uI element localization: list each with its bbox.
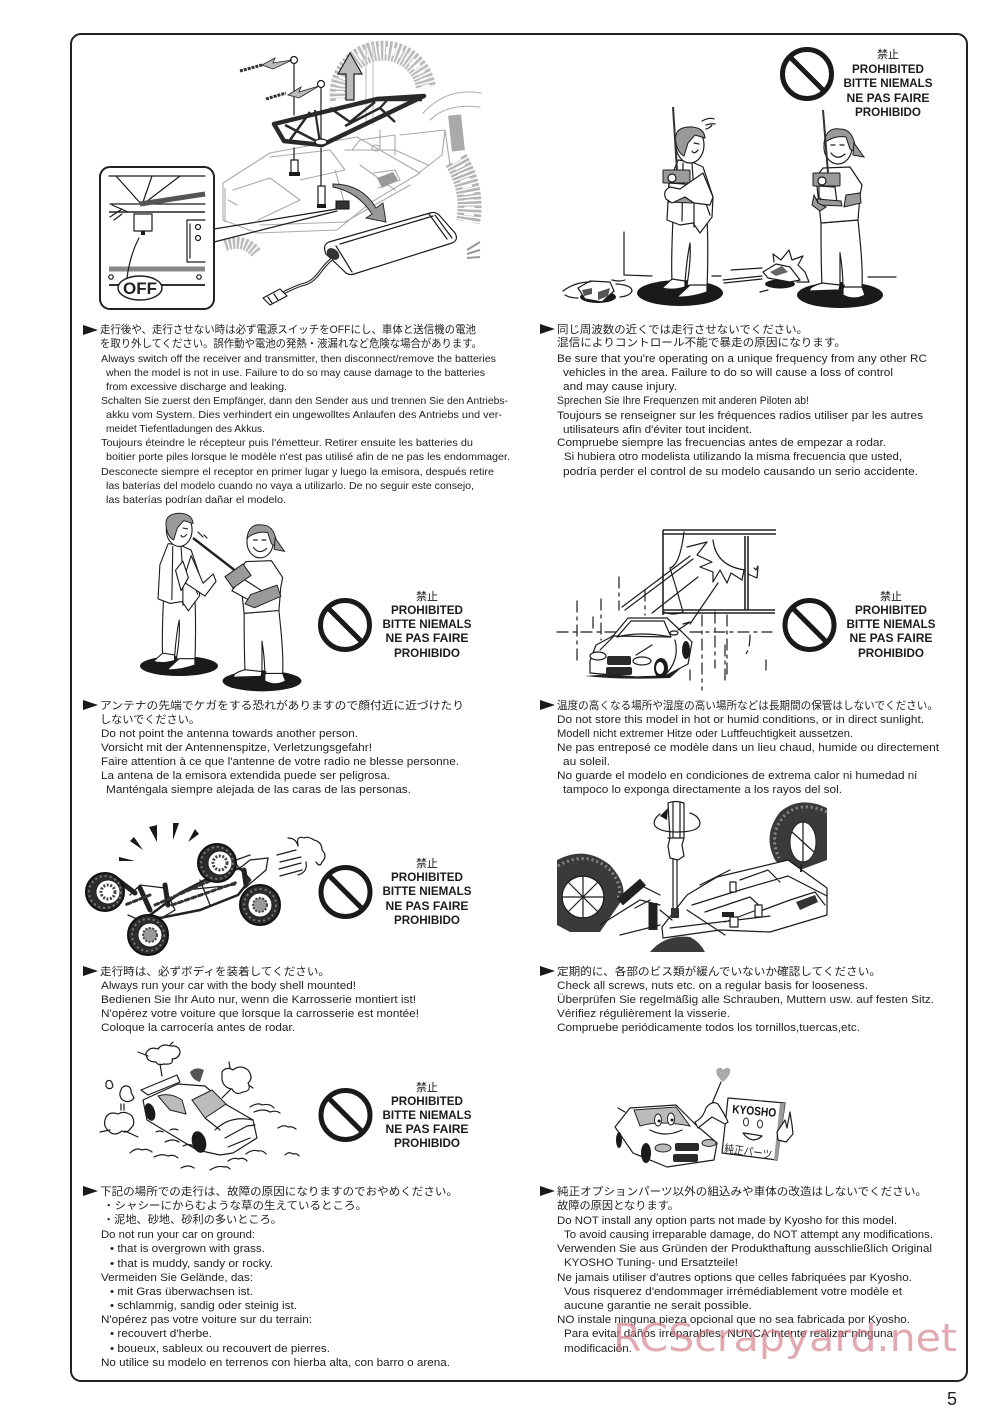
text block: vehicles in the area. Failure to do so will cause a loss of control [563, 367, 893, 379]
text block: 混信によりコントロール不能で暴走の原因になります。 [557, 336, 846, 349]
text block: 温度の高くなる場所や湿度の高い場所などは長期間の保管はしないでください。 [557, 699, 938, 712]
text block: 同じ周波数の近くでは走行させないでください。 [557, 323, 808, 336]
suspension [600, 882, 672, 935]
text block: Modell nicht extremer Hitze oder Luftfeuchtigkeit aussetzen. [557, 728, 853, 740]
illustration: two drivers crashing cars [563, 107, 896, 308]
parts box: 純正パーツ [724, 1142, 773, 1162]
prohibited sign: PROHIBITED [391, 603, 463, 617]
text block: 純正オプションパーツ以外の組込みや車体の改造はしないでください。 [557, 1185, 927, 1198]
text block: Si hubiera otro modelista utilizando la misma frecuencia que usted, [564, 451, 902, 463]
text block [83, 965, 419, 1034]
text block: las baterías podrían dañar el modelo. [106, 495, 286, 506]
text block [83, 699, 464, 796]
illustration: buggy without body [86, 823, 325, 955]
panel: antenna [83, 513, 472, 796]
text block: akku vom System. Dies verhindert ein ungewolltes Anlaufen des Antriebs und ver- [106, 410, 502, 421]
text block [540, 965, 934, 1034]
text block: and may cause injury. [563, 381, 677, 393]
sun and flare [687, 540, 745, 583]
prohibited sign: NE PAS FAIRE [386, 899, 468, 913]
person with cap [223, 525, 301, 691]
text block: utilisateurs afin d'éviter tout incident. [563, 424, 752, 436]
heat dashes [557, 577, 772, 690]
prohibited sign: NE PAS FAIRE [386, 1122, 468, 1136]
watermark: RCScrapyard.net [613, 1316, 957, 1360]
prohibited sign: NE PAS FAIRE [850, 631, 932, 645]
text block: • boueux, sableux ou recouvert de pierres. [110, 1343, 330, 1355]
prohibited sign: PROHIBIDO [394, 646, 460, 660]
text block: ・シャシーにからむような草の生えているところ。 [103, 1199, 367, 1212]
panel: check screws [540, 802, 934, 1034]
panel: heat and humidity [540, 530, 939, 796]
car with face [615, 1105, 717, 1167]
prohibited sign: 禁止 [880, 590, 902, 603]
panel: genuine parts [540, 1068, 933, 1355]
prohibited sign: BITTE NIEMALS [382, 617, 472, 631]
prohibited sign: 禁止 [416, 857, 438, 870]
text block: Schalten Sie zuerst den Empfänger, dann den Sender aus und trennen Sie den Antriebs- [101, 396, 508, 407]
text block [83, 1185, 458, 1369]
text block: Compruebe siempre las frecuencias antes de empezar a rodar. [557, 437, 886, 449]
text block: Vermeiden Sie Gelände, das: [101, 1272, 253, 1284]
prohibited sign: 禁止 [877, 48, 899, 61]
prohibited sign: 禁止 [416, 1081, 438, 1094]
page number: 5 [947, 1389, 957, 1409]
text block: Do not store this model in hot or humid conditions, or in direct sunlight. [557, 714, 924, 726]
text block: Do NOT install any option parts not made by Kyosho for this model. [557, 1215, 897, 1227]
text block: • that is muddy, sandy or rocky. [110, 1258, 273, 1270]
text block: NO instale ninguna pieza opcional que no sea fabricada por Kyosho. [557, 1314, 910, 1326]
prohibited sign: PROHIBIDO [858, 646, 924, 660]
prohibited sign [782, 48, 932, 119]
driver with jacket [637, 107, 723, 306]
text block: Toujours éteindre le récepteur puis l'émetteur. Retirer ensuite les batteries du [101, 438, 473, 449]
prohibited sign: PROHIBIDO [394, 913, 460, 927]
text block: Always run your car with the body shell mounted! [101, 980, 356, 992]
text block: tampoco lo exponga directamente a los rayos del sol. [563, 784, 842, 796]
text block: ・泥地、砂地、砂利の多いところ。 [103, 1213, 282, 1226]
prohibited sign [320, 590, 472, 660]
text block [83, 322, 510, 506]
text block: Ne pas entreposé ce modèle dans un lieu chaud, humide ou directement [557, 742, 939, 754]
text block: podría perder el control de su modelo causando un serio accidente. [563, 466, 918, 478]
text block: Faire attention à ce que l'antenne de votre radio ne blesse personne. [101, 756, 459, 768]
crashing car [723, 250, 809, 292]
text block: Do not run your car on ground: [101, 1229, 255, 1241]
prohibited sign [321, 1081, 472, 1150]
text block: Vous risquerez d'endommager irrémédiablement votre modèle et [564, 1286, 902, 1298]
text block [540, 1185, 933, 1355]
prohibited sign: PROHIBITED [391, 1094, 463, 1108]
text block [540, 323, 927, 478]
prohibited sign [321, 857, 472, 927]
text block: Ne jamais utiliser d'autres options que celles fabriquées par Kyosho. [557, 1272, 912, 1284]
text block: Verwenden Sie aus Gründen der Produkthaftung ausschließlich Original [557, 1243, 932, 1255]
prohibited sign: NE PAS FAIRE [386, 631, 468, 645]
person with jacket [140, 513, 218, 676]
inset: OFF switch [100, 167, 214, 309]
callout lines [214, 209, 337, 242]
text block: N'opérez votre voiture que lorsque la carrosserie est montée! [101, 1008, 419, 1020]
text block: La antena de la emisora extendida puede ser peligrosa. [101, 770, 390, 782]
text block [540, 699, 939, 796]
up arrow [338, 53, 362, 100]
prohibited sign: PROHIBITED [852, 62, 924, 76]
prohibited sign: BITTE NIEMALS [382, 1108, 472, 1122]
panel: body shell [83, 823, 472, 1034]
text block: しないでください。 [100, 714, 200, 726]
parts box [722, 1098, 785, 1162]
curved removal arrow [333, 184, 386, 222]
prohibited sign: PROHIBITED [855, 603, 927, 617]
illustration: car in grass and mud [100, 1042, 299, 1170]
text block: Check all screws, nuts etc. on a regular basis for looseness. [557, 980, 868, 992]
text block: Bedienen Sie Ihr Auto nur, wenn die Karrosserie montiert ist! [101, 994, 416, 1006]
prohibited sign: PROHIBIDO [394, 1136, 460, 1150]
text block: N'opérez pas votre voiture sur du terrain: [101, 1314, 312, 1326]
text block: Vérifiez régulièrement la visserie. [557, 1008, 730, 1020]
sun rays [622, 556, 718, 624]
text block: Sprechen Sie Ihre Frequenzen mit anderen Piloten ab! [557, 395, 809, 407]
tyres [86, 844, 280, 955]
text block: modificación. [564, 1343, 632, 1355]
mud lumps [130, 1104, 299, 1170]
prohibited sign: PROHIBIDO [855, 105, 921, 119]
text block: au soleil. [563, 756, 610, 768]
victory hand [777, 1112, 793, 1142]
car [585, 618, 692, 679]
text block: Compruebe periódicamente todos los tornillos,tuercas,etc. [557, 1022, 860, 1034]
rear tyres ghost [225, 44, 480, 258]
illustration: ghost chassis with battery removal [100, 44, 481, 309]
inset: OFF switch: OFF [123, 279, 157, 298]
text block: To avoid causing irreparable damage, do NOT attempt any modifications. [564, 1229, 933, 1241]
walls and ground lines [624, 232, 896, 277]
text block: • that is overgrown with grass. [110, 1243, 265, 1255]
text block: Coloque la carrocería antes de rodar. [101, 1022, 295, 1034]
text block: 故障の原因となります。 [557, 1199, 679, 1212]
illustration: car and KYOSHO parts box [615, 1068, 793, 1167]
text block: No guarde el modelo en condiciones de extrema calor ni humedad ni [557, 770, 917, 782]
parts box: KYOSHO [732, 1102, 777, 1120]
spinning car [563, 280, 632, 303]
prohibited sign: 禁止 [416, 590, 438, 603]
prohibited sign: BITTE NIEMALS [382, 884, 472, 898]
text block: boitier porte piles lorsque le modèle n'est pas utilisé afin de ne pas les endommager. [106, 452, 510, 463]
text block: from excessive discharge and leaking. [106, 382, 287, 393]
text block: when the model is not in use. Failure to do so may cause damage to the batteries [105, 368, 485, 379]
tyres [557, 802, 827, 952]
screws and posts [240, 56, 327, 208]
window frame [663, 530, 776, 615]
battery pack [263, 212, 456, 305]
text block: meidet Tiefentladungen des Akkus. [106, 424, 265, 435]
text block: 走行後や、走行させない時は必ず電源スイッチをOFFにし、車体と送信機の電池 [100, 322, 476, 336]
grass tufts [100, 1042, 253, 1137]
driver with cap [797, 110, 883, 308]
text block: las baterías del modelo cuando no vaya a utilizarlo. De no seguir este consejo, [106, 481, 474, 492]
text block: Vorsicht mit der Antennenspitze, Verletzungsgefahr! [101, 742, 372, 754]
text block: 下記の場所での走行は、故障の原因になりますのでおやめください。 [100, 1185, 458, 1198]
text block: • schlammig, sandig oder steinig ist. [110, 1300, 297, 1312]
chassis [662, 860, 827, 938]
text block: No utilice su modelo en terrenos con hierba alta, con barro o arena. [101, 1357, 450, 1369]
impact marks [119, 823, 199, 861]
transmitter and antenna [193, 532, 251, 588]
text block: を取り外してください。誤作動や電池の発熱・液漏れなど危険な場合があります。 [100, 336, 482, 350]
text block: Desconecte siempre el receptor en primer lugar y luego la emisora, después retire [101, 467, 494, 478]
text block: Be sure that you're operating on a unique frequency from any other RC [557, 353, 927, 365]
switch box [336, 201, 349, 209]
heart on stick [711, 1068, 730, 1106]
text block: Manténgala siempre alejada de las caras de las personas. [106, 784, 411, 796]
prohibited sign: PROHIBITED [391, 870, 463, 884]
text block: Überprüfen Sie regelmäßig alle Schrauben, Muttern usw. auf festen Sitz. [557, 994, 934, 1006]
text block: Para evitar daños irreparables, NUNCA intente realizar ninguna [564, 1328, 893, 1340]
prohibited sign [785, 590, 936, 660]
car [141, 1075, 257, 1155]
joined hands [695, 1103, 728, 1128]
text block: aucune garantie ne serait possible. [564, 1300, 752, 1312]
text block: アンテナの先端でケガをする恐れがありますので顔付近に近づけたり [100, 699, 464, 712]
text block: 定期的に、各部のビス類が緩んでいないか確認してください。 [557, 965, 881, 978]
screwdriver [654, 802, 700, 918]
chassis outline [223, 92, 481, 233]
panel: frequency [540, 48, 932, 478]
text block: • recouvert d'herbe. [110, 1328, 212, 1340]
text block: • mit Gras überwachsen ist. [110, 1286, 253, 1298]
illustration: screwdriver on chassis [557, 802, 827, 952]
exhaust cloud [277, 837, 325, 876]
panel: battery removal [83, 44, 510, 506]
illustration: car in sunlit window [557, 530, 776, 690]
illustration: antenna pointed at face [140, 513, 301, 691]
prohibited sign: NE PAS FAIRE [846, 91, 930, 105]
text block: 走行時は、必ずボディを装着してください。 [100, 965, 330, 978]
prohibited sign: BITTE NIEMALS [846, 617, 936, 631]
prohibited sign: BITTE NIEMALS [844, 76, 932, 90]
chassis [118, 845, 268, 925]
battery tray [274, 96, 424, 145]
text block: Toujours se renseigner sur les fréquences radios utiliser par les autres [557, 410, 923, 422]
panel: terrain [83, 1042, 472, 1369]
text block: KYOSHO Tuning- und Ersatzteile! [564, 1257, 738, 1269]
text block: Do not point the antenna towards another person. [101, 728, 358, 740]
text block: Always switch off the receiver and transmitter, then disconnect/remove the batteries [101, 354, 496, 365]
